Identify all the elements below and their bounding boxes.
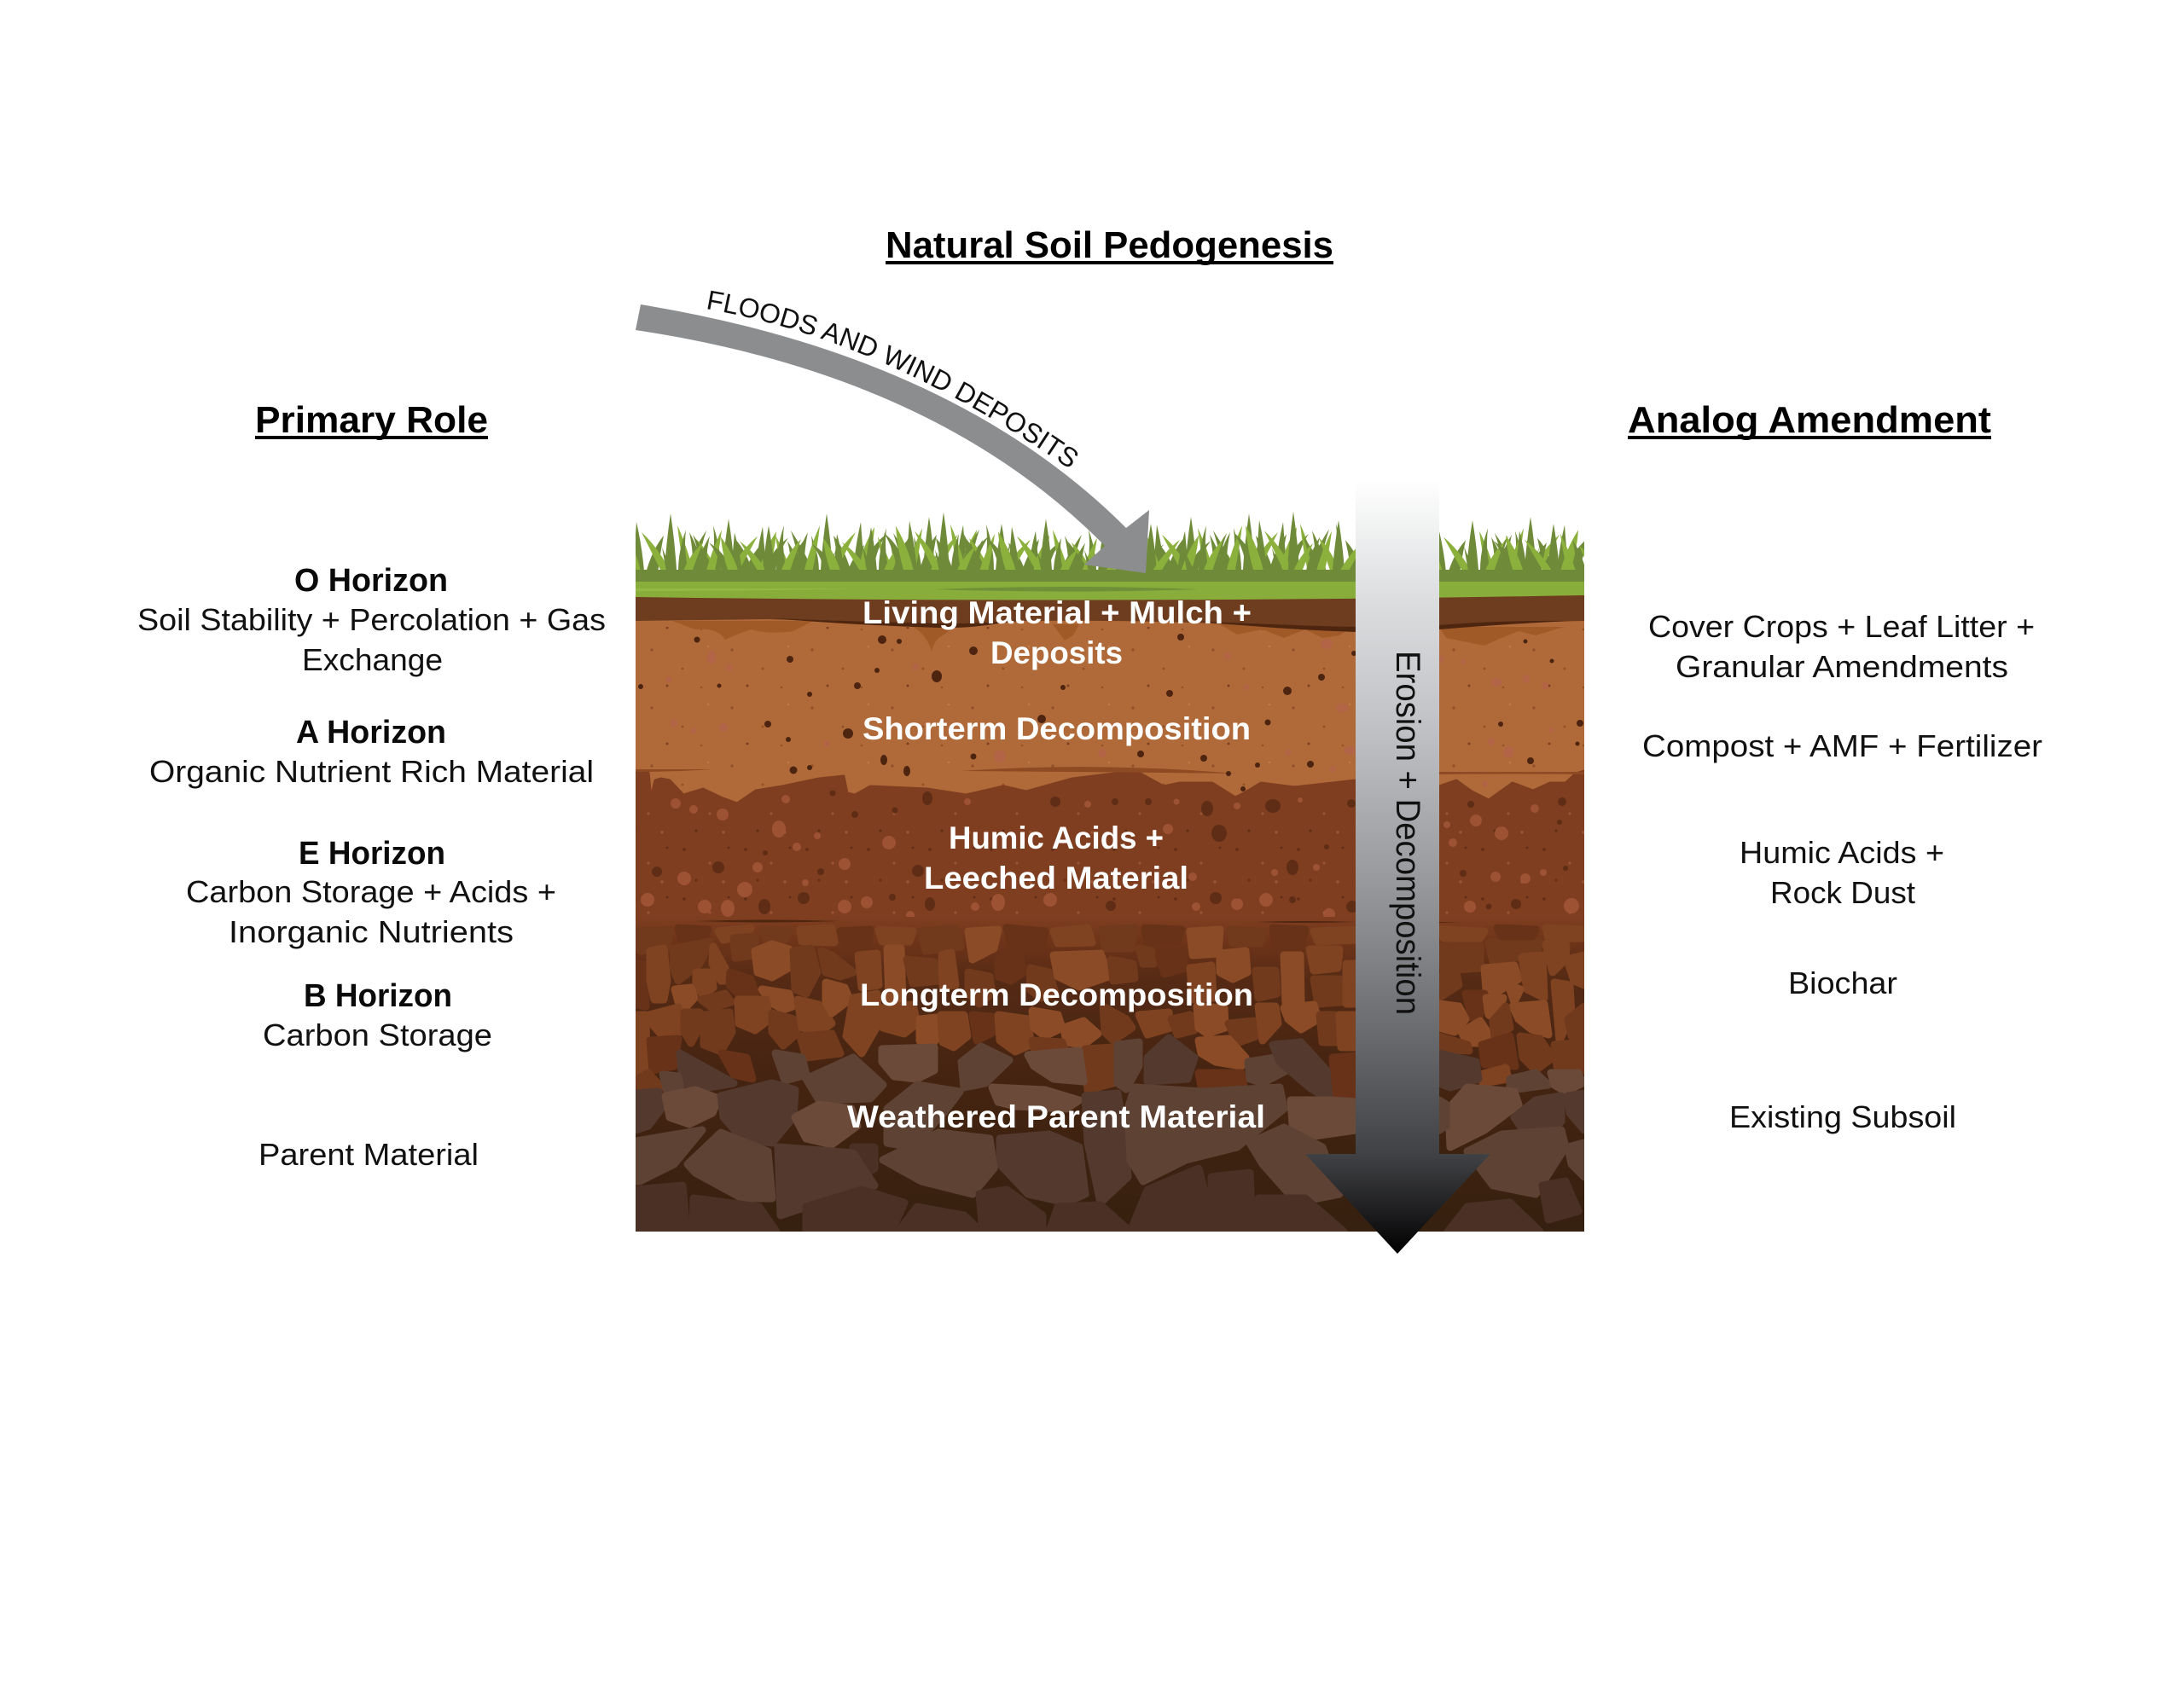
parent material role: Parent Material [258, 1137, 479, 1172]
label: shorterm decomposition: Shorterm Decomposition [863, 711, 1251, 746]
soil particles in topsoil: dark grains [638, 634, 1583, 791]
transition seam between subsoil and stones [695, 919, 1461, 923]
heading: Primary Role: Primary Role [255, 399, 488, 441]
amendment for B horizon: Biochar [1788, 965, 1897, 1000]
label: humic acids [924, 820, 1188, 896]
column: primary role by horizon [137, 563, 606, 1172]
amendment for E horizon: Humic Acids + [1740, 835, 1944, 870]
label: living material: Deposits [990, 635, 1123, 670]
amendment for O horizon: Cover Crops + Leaf Litter + [1648, 609, 2035, 644]
O horizon role: Exchange [302, 642, 443, 677]
arrow label: erosion + decomposition: Erosion + Decomposition [1389, 651, 1426, 1015]
arrow: erosion + decomposition [1305, 480, 1490, 1254]
amendment for O horizon: Granular Amendments [1676, 649, 2008, 684]
grass ground strip [636, 570, 1584, 602]
B horizon orange stones [636, 936, 1584, 1096]
A horizon topsoil layer [636, 619, 1584, 802]
amendment for E horizon [1740, 835, 1944, 910]
B horizon and parent material ground [636, 917, 1584, 1232]
soil particles in subsoil: pink grains [641, 795, 1579, 920]
B horizon role [263, 978, 492, 1052]
A horizon role: A Horizon [296, 715, 446, 751]
E horizon role: Carbon Storage + Acids + [186, 874, 556, 909]
label: humic acids: Humic Acids + [949, 820, 1164, 855]
label: longterm decomposition: Longterm Decomposition [860, 977, 1253, 1012]
heading: Analog Amendment: Analog Amendment [1628, 399, 1991, 441]
label: living material: Living Material + Mulch + [863, 595, 1252, 630]
O horizon role [137, 563, 606, 677]
amendment for E horizon: Rock Dust [1770, 875, 1915, 910]
soil particles in topsoil: pink grains [665, 639, 1554, 786]
label: humic acids: Leeched Material [924, 861, 1188, 896]
label: living material [863, 595, 1252, 670]
parent material grey-brown stones [636, 1038, 1584, 1232]
arrow label: floods and wind deposits: FLOODS AND WIND DEPOSITS [708, 290, 1078, 467]
amendment for O horizon [1648, 609, 2035, 684]
E horizon subsoil layer [636, 767, 1584, 917]
soil cross-section illustration [611, 512, 1620, 1232]
grass blades [636, 512, 1584, 570]
B horizon role: Carbon Storage [263, 1017, 492, 1052]
O horizon role: O Horizon [294, 563, 448, 599]
E horizon role [186, 836, 556, 949]
O horizon organic band [636, 595, 1584, 632]
amendment for parent material: Existing Subsoil [1729, 1099, 1956, 1134]
heading: Natural Soil Pedogenesis: Natural Soil Pedogenesis [886, 224, 1333, 266]
column: analog amendments [1642, 609, 2042, 1134]
O horizon role: Soil Stability + Percolation + Gas [137, 602, 606, 637]
E horizon role: Inorganic Nutrients [229, 914, 514, 949]
amendment for A horizon: Compost + AMF + Fertilizer [1642, 728, 2042, 763]
arrow: floods and wind deposits [636, 304, 1149, 573]
transition soil blobs [638, 928, 1584, 971]
A horizon role [149, 715, 594, 789]
E horizon role: E Horizon [299, 836, 445, 872]
A horizon role: Organic Nutrient Rich Material [149, 754, 594, 789]
layer labels on soil [847, 595, 1265, 1134]
B horizon role: B Horizon [304, 978, 452, 1014]
soil particles in subsoil: dark grains [652, 790, 1568, 914]
label: weathered parent material: Weathered Parent Material [847, 1099, 1265, 1134]
